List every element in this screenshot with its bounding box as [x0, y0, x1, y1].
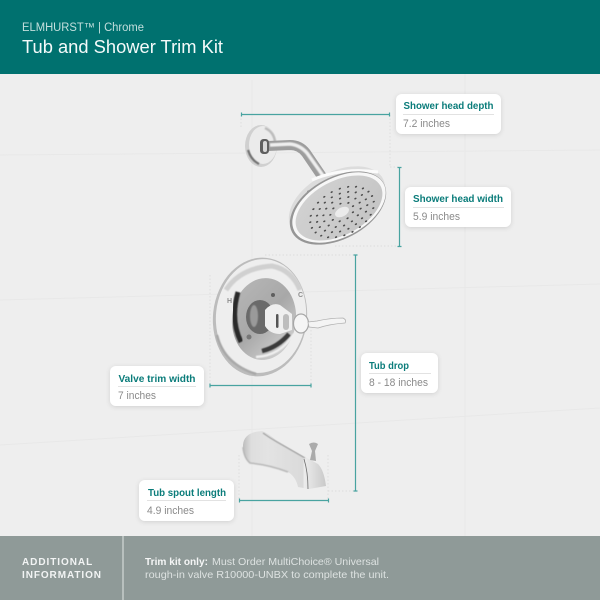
inner plate	[228, 275, 300, 363]
callout: shower head depth: 7.2 inches	[403, 118, 450, 130]
diverter knob	[309, 442, 318, 461]
callout: tub drop: Tub drop	[369, 360, 409, 372]
callout: tub spout length: 4.9 inches	[147, 505, 194, 517]
shower head face	[278, 156, 398, 260]
callout: valve trim width	[110, 366, 204, 406]
wall background	[0, 74, 600, 536]
dimension: valve trim width	[210, 384, 311, 388]
dotted guide lines	[210, 115, 399, 500]
header eyebrow: ELMHURST™ | Chrome	[22, 22, 144, 34]
footer note: Must Order MultiChoice® Universal	[212, 556, 379, 568]
footer band	[0, 536, 600, 600]
icon: tub spout	[243, 431, 326, 489]
callout: valve trim width: 7 inches	[118, 390, 156, 402]
header band	[0, 0, 600, 74]
footer heading: INFORMATION	[22, 570, 101, 581]
valve body	[246, 300, 274, 334]
callout: shower head depth: Shower head depth	[404, 100, 494, 112]
callout: shower head width: Shower head width	[413, 193, 503, 205]
callout: valve trim width: Valve trim width	[118, 373, 196, 385]
title: Tub and Shower Trim Kit	[22, 37, 223, 57]
footer heading: ADDITIONAL	[22, 557, 92, 568]
shower head rim	[277, 151, 397, 255]
callout: shower head width	[405, 187, 511, 227]
dimension: tub spout length	[240, 498, 328, 502]
footer note: rough-in valve R10000-UNBX to complete the unit.	[145, 569, 389, 581]
valve plate lettering: H	[227, 298, 232, 305]
callout: tub spout length: Tub spout length	[148, 487, 226, 499]
dimension: shower head width	[398, 168, 402, 246]
shower arm	[268, 145, 323, 178]
callout: tub spout length	[139, 480, 234, 521]
wall flange	[245, 125, 277, 167]
icon: shower arm and head	[245, 125, 398, 260]
arm collar	[260, 139, 269, 154]
lever handle	[294, 314, 308, 333]
dimension: shower head depth	[242, 112, 390, 116]
footer note: Trim kit only:	[145, 556, 208, 568]
callout: tub drop: 8 - 18 inches	[369, 377, 428, 389]
dimension: tub drop	[354, 255, 358, 491]
callout: tub drop	[361, 353, 438, 393]
callout: shower head depth	[396, 94, 501, 134]
spray nozzles	[301, 176, 383, 248]
callout: shower head width: 5.9 inches	[413, 211, 460, 223]
icon: valve trim: C	[298, 292, 303, 299]
icon: valve trim	[207, 253, 346, 381]
escutcheon plate	[207, 253, 313, 381]
